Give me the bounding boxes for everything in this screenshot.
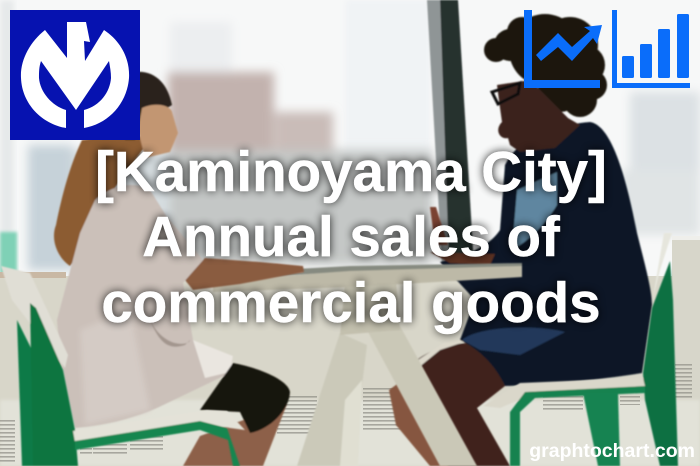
title: Annual sales of	[142, 205, 560, 268]
icon: bar chart	[612, 10, 690, 88]
title	[95, 140, 607, 334]
logo: Kaminoyama City emblem	[10, 10, 140, 140]
title shadow: Annual sales of	[142, 205, 560, 268]
title shadow: commercial goods	[101, 271, 601, 334]
dress	[440, 122, 652, 386]
shirt	[57, 185, 233, 428]
glasses	[492, 83, 520, 104]
watermark: graphtochart.com: graphtochart.com	[529, 440, 695, 462]
right chair	[483, 233, 678, 466]
title: [Kaminoyama City]	[95, 140, 607, 203]
table	[213, 263, 522, 466]
title shadow	[95, 140, 607, 334]
legs	[405, 343, 510, 466]
title: commercial goods	[101, 271, 601, 334]
shorts	[200, 363, 290, 433]
icon: line chart with arrow	[524, 10, 602, 88]
afro hair	[484, 14, 607, 117]
hand	[430, 207, 448, 245]
wall and radiator vents	[0, 236, 700, 466]
window mullion	[427, 0, 474, 266]
title shadow: [Kaminoyama City]	[95, 140, 607, 203]
left woman	[54, 72, 304, 466]
face	[138, 105, 178, 158]
lower leg	[183, 404, 287, 466]
neck and face	[497, 80, 580, 152]
right woman	[389, 14, 652, 466]
hair	[54, 135, 150, 266]
left chair	[1, 266, 245, 466]
forearm	[185, 258, 304, 290]
